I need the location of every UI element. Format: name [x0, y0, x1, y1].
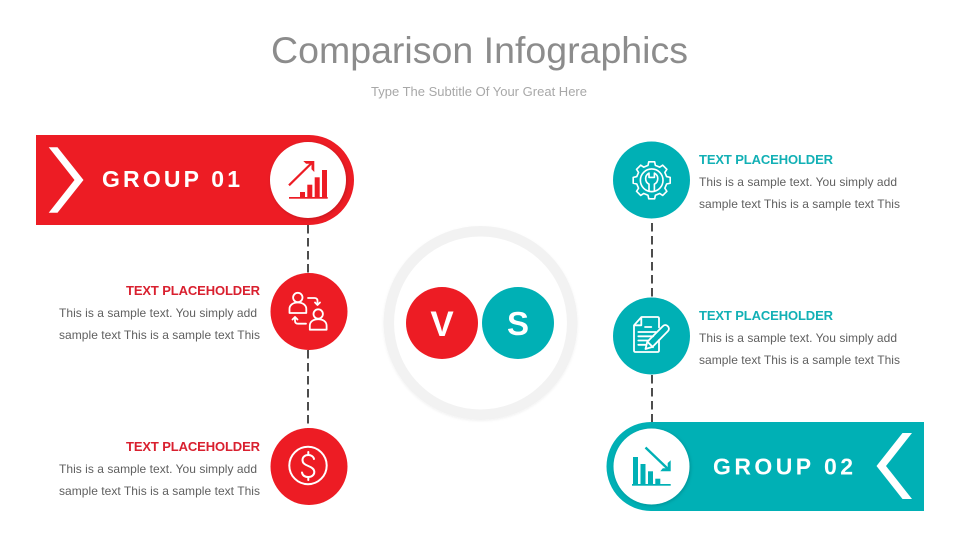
icon: chevron right	[49, 147, 84, 213]
item heading: TEXT PLACEHOLDER	[699, 308, 834, 323]
item body line 2: sample text This is a sample text This	[699, 353, 900, 367]
item body line 2: sample text This is a sample text This	[59, 484, 260, 498]
white icon disc	[614, 428, 690, 504]
panel: right item 2	[613, 298, 900, 374]
title: Comparison Infographics	[271, 29, 688, 71]
item body line 2: sample text This is a sample text This	[59, 328, 260, 342]
item heading: TEXT PLACEHOLDER	[126, 439, 261, 454]
icon: chevron left	[876, 433, 912, 499]
connector: left bottom dashed line	[307, 350, 309, 429]
letter S: S	[507, 305, 529, 342]
white icon disc	[270, 142, 346, 218]
item body line 2: sample text This is a sample text This	[699, 197, 900, 211]
icon: document and pen	[634, 317, 669, 352]
item body line 1: This is a sample text. You simply add	[59, 306, 257, 320]
banner shape teal	[606, 422, 924, 511]
group 02 label: GROUP 02	[713, 454, 853, 480]
group 01 label: GROUP 01	[102, 166, 240, 192]
panel: right item 1	[613, 142, 900, 218]
panel: left item 1	[59, 273, 348, 350]
red circle	[270, 273, 348, 350]
outer ring	[389, 231, 572, 415]
icon: rising chart	[289, 161, 328, 199]
item body line 1: This is a sample text. You simply add	[59, 462, 257, 476]
panel: left item 2	[59, 428, 348, 505]
icon: people exchange	[290, 293, 327, 330]
V circle	[406, 287, 478, 359]
connector: right top dashed line	[651, 223, 653, 298]
panel: VS badge	[389, 231, 572, 415]
banner shape red	[36, 135, 354, 225]
panel: group 01 banner	[36, 135, 354, 225]
connector: right bottom dashed line	[651, 375, 653, 423]
teal circle	[613, 298, 690, 374]
panel: group 02 banner	[606, 422, 924, 511]
connector: left top dashed line	[307, 225, 309, 274]
S circle	[482, 287, 554, 359]
red circle	[270, 428, 348, 505]
item body line 1: This is a sample text. You simply add	[699, 331, 897, 345]
teal circle	[613, 142, 690, 218]
item body line 1: This is a sample text. You simply add	[699, 175, 897, 189]
icon: falling chart	[632, 448, 671, 486]
item heading: TEXT PLACEHOLDER	[699, 152, 834, 167]
item heading: TEXT PLACEHOLDER	[126, 283, 261, 298]
letter V: V	[430, 305, 454, 344]
icon: gear with wrench	[633, 162, 670, 199]
icon: dollar coin	[289, 447, 327, 484]
subtitle: Type The Subtitle Of Your Great Here	[371, 84, 587, 99]
